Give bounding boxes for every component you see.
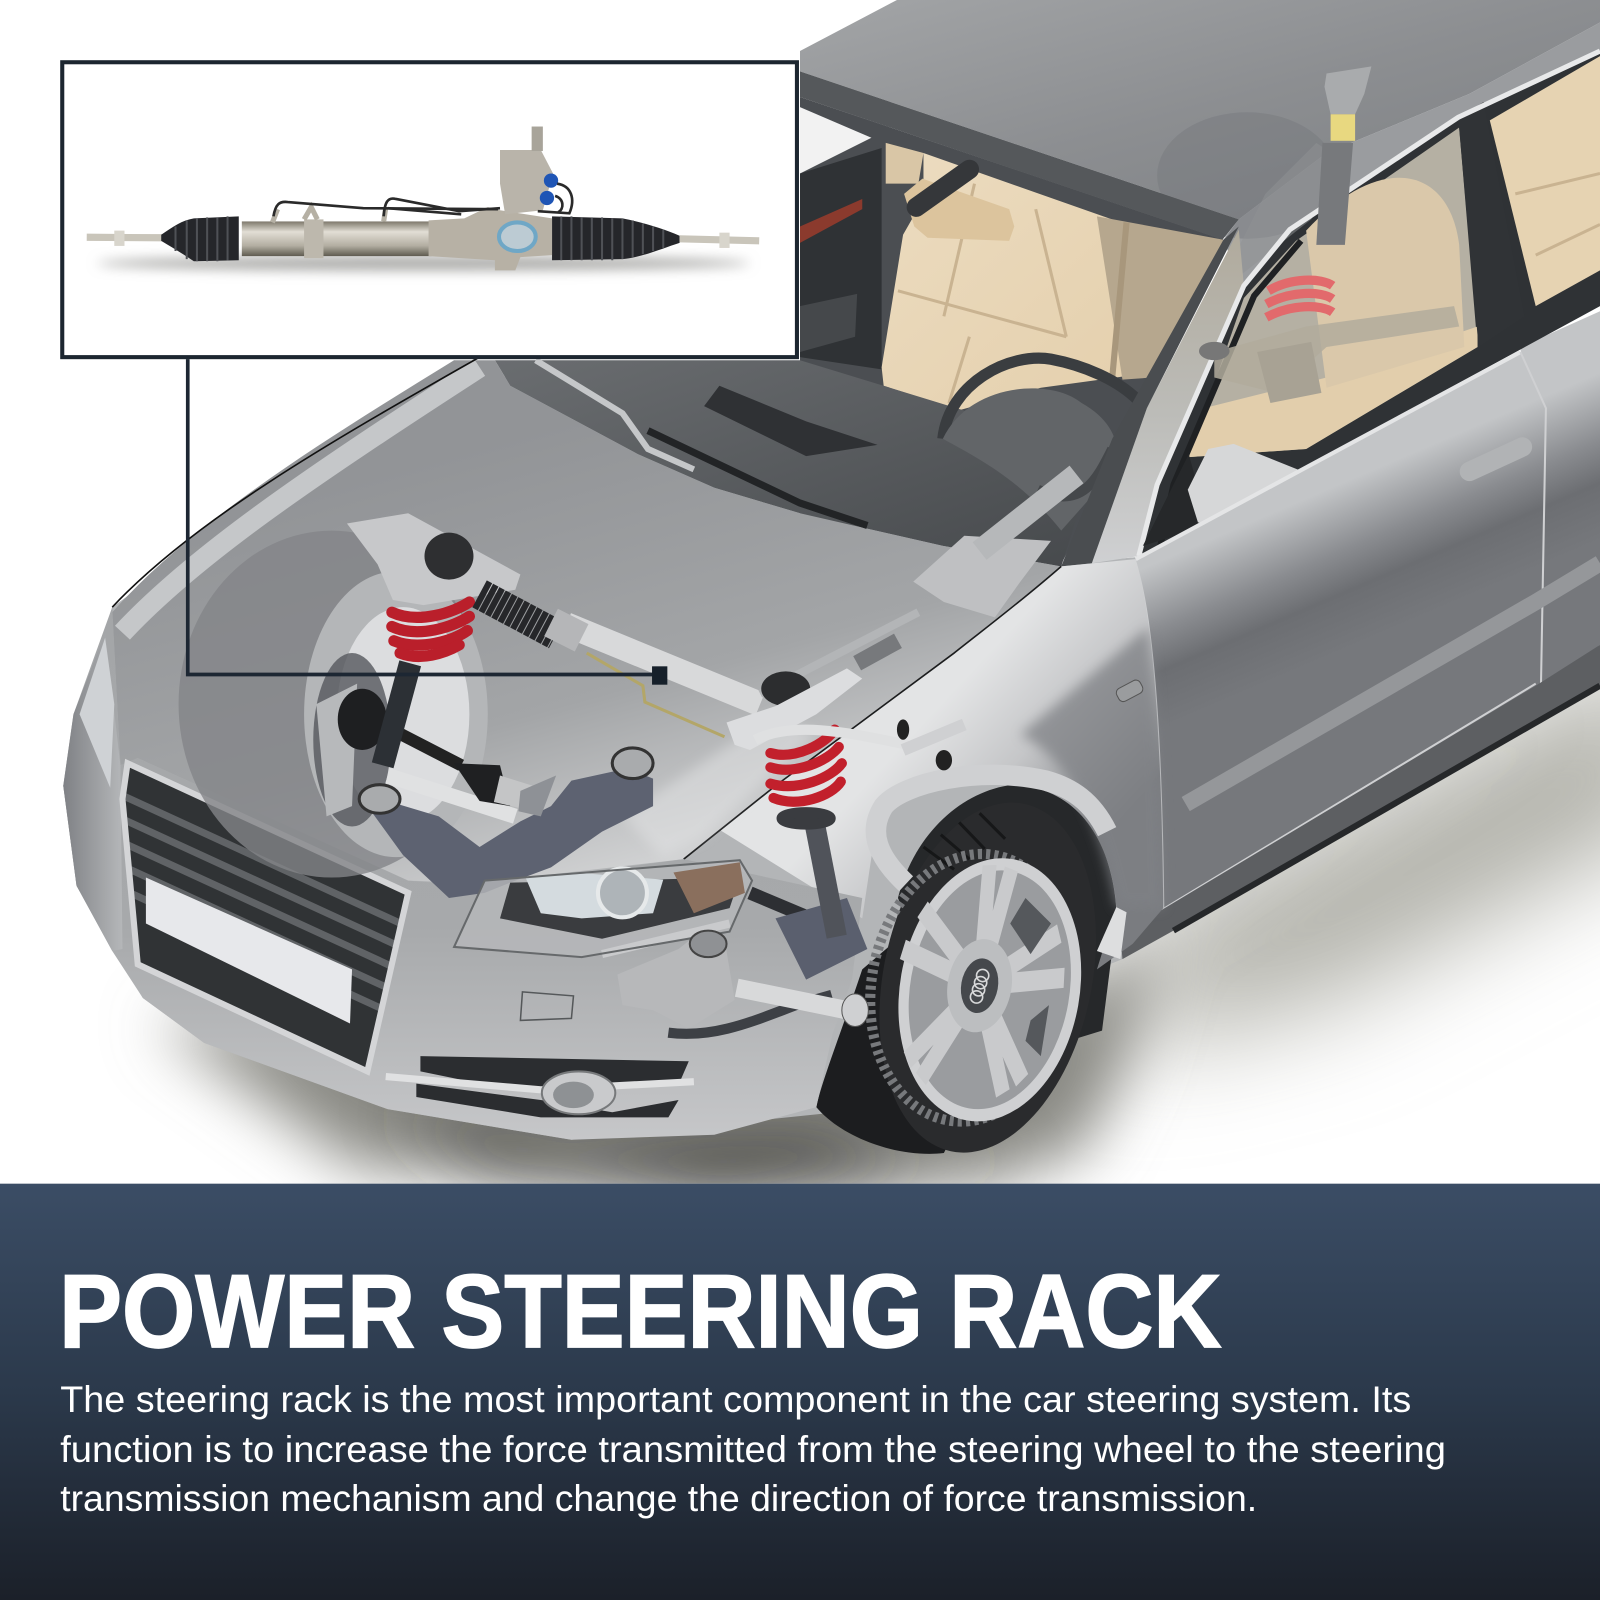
side window frame dark (1136, 51, 1600, 559)
rear view mirror (904, 169, 1014, 241)
collar (304, 219, 323, 258)
steering column (760, 474, 1077, 694)
stabilizer bar (668, 995, 832, 1034)
front-left shock (383, 663, 410, 765)
main tube (242, 221, 432, 256)
alloy wheel (898, 858, 1082, 1122)
power steering rack product (87, 127, 759, 270)
description text: function is to increase the force transmitted from the steering wheel to the steering (60, 1429, 1446, 1470)
hood left edge highlight (122, 367, 480, 633)
front-right coil spring (770, 730, 842, 824)
rear strut (1316, 66, 1371, 245)
hood (112, 360, 1061, 883)
exterior mirror (1142, 444, 1298, 546)
blue caps (540, 173, 558, 205)
ghost rear tyre through roof (1157, 112, 1337, 239)
left headlight (80, 638, 114, 788)
subframe (359, 748, 653, 898)
right boot ribs (561, 216, 663, 260)
fittings (272, 207, 490, 222)
left boot (161, 216, 239, 261)
roof rail (1223, 22, 1600, 291)
bumper (63, 607, 862, 1140)
steering wheel and cowl (943, 358, 1138, 531)
subframe right (776, 898, 867, 980)
ground shadow under the car (153, 643, 1600, 1189)
left boot ribs (176, 216, 228, 261)
front-left CV boot (338, 689, 387, 750)
lower air intake (386, 1056, 694, 1117)
front-left coil spring (392, 602, 469, 656)
wheel badge (960, 958, 998, 1013)
right tie rod (680, 233, 759, 248)
rear door (1520, 311, 1600, 694)
front-right drive shaft (750, 893, 847, 934)
wheel openings (1010, 898, 1051, 1056)
door molding (1186, 563, 1600, 804)
right boot (552, 216, 680, 260)
ghost front-left wheel (179, 531, 488, 878)
bumper left side (63, 633, 122, 951)
fender arc highlight (876, 775, 1107, 884)
licence plate (146, 878, 352, 1023)
door handle (1469, 447, 1522, 471)
wiper strip (536, 360, 878, 526)
roof (800, 0, 1600, 219)
sill (1117, 645, 1600, 959)
fender (714, 559, 1163, 969)
title: POWER STEERING RACK (59, 1254, 1221, 1370)
left tie rod (87, 231, 163, 246)
hood outer edge (112, 357, 480, 607)
steering boot (480, 594, 556, 635)
headlight (454, 860, 752, 957)
front-left mount (347, 513, 520, 605)
lower control arm (737, 988, 847, 1010)
sill lower edge (1173, 686, 1600, 931)
panel: description band (0, 1184, 1600, 1600)
hydraulic pipes (273, 184, 572, 216)
front-right shock (814, 821, 837, 937)
rear coil spring (1266, 280, 1333, 317)
description text: transmission mechanism and change the direction of force transmission. (60, 1478, 1257, 1519)
description text: The steering rack is the most important component in the car steering system. Its (60, 1379, 1411, 1420)
steering rack tube (551, 622, 760, 737)
panel: rack detail inset (62, 62, 797, 357)
dashboard (495, 360, 1102, 566)
rack shadow (97, 256, 750, 270)
windshield interior (800, 97, 1223, 566)
window pillars and roof chrome (1061, 51, 1600, 566)
arch liner (1097, 907, 1127, 959)
grille (112, 763, 418, 1129)
brake disc (865, 848, 1030, 1127)
blue ring port (499, 222, 536, 251)
front tyre (816, 812, 1078, 1154)
ghost rear suspension (1199, 66, 1459, 403)
fog lamp (542, 1071, 615, 1114)
rear window seat (1490, 56, 1600, 306)
hood lower light sweep (622, 714, 816, 857)
front side window (1189, 128, 1478, 457)
fender crease lower tone (1020, 628, 1163, 908)
car illustration (63, 0, 1600, 1173)
lower arm and drive shaft (388, 733, 556, 816)
housing (429, 207, 552, 270)
front-right mount and arm (727, 668, 964, 770)
front door (1136, 352, 1600, 910)
wheel arch dark (898, 786, 1116, 1038)
front-right bracket (617, 931, 735, 1029)
windshield header (800, 71, 1239, 240)
zoom call-out leader line (188, 359, 667, 685)
valve body (500, 150, 553, 214)
hood seam (684, 566, 1061, 859)
side marker (1116, 680, 1144, 702)
body underlay (63, 360, 1163, 1140)
input shaft (532, 127, 543, 151)
washer cap (520, 992, 573, 1020)
ball joint (842, 994, 868, 1027)
rear arms (1199, 306, 1459, 403)
description text (60, 1379, 1446, 1519)
